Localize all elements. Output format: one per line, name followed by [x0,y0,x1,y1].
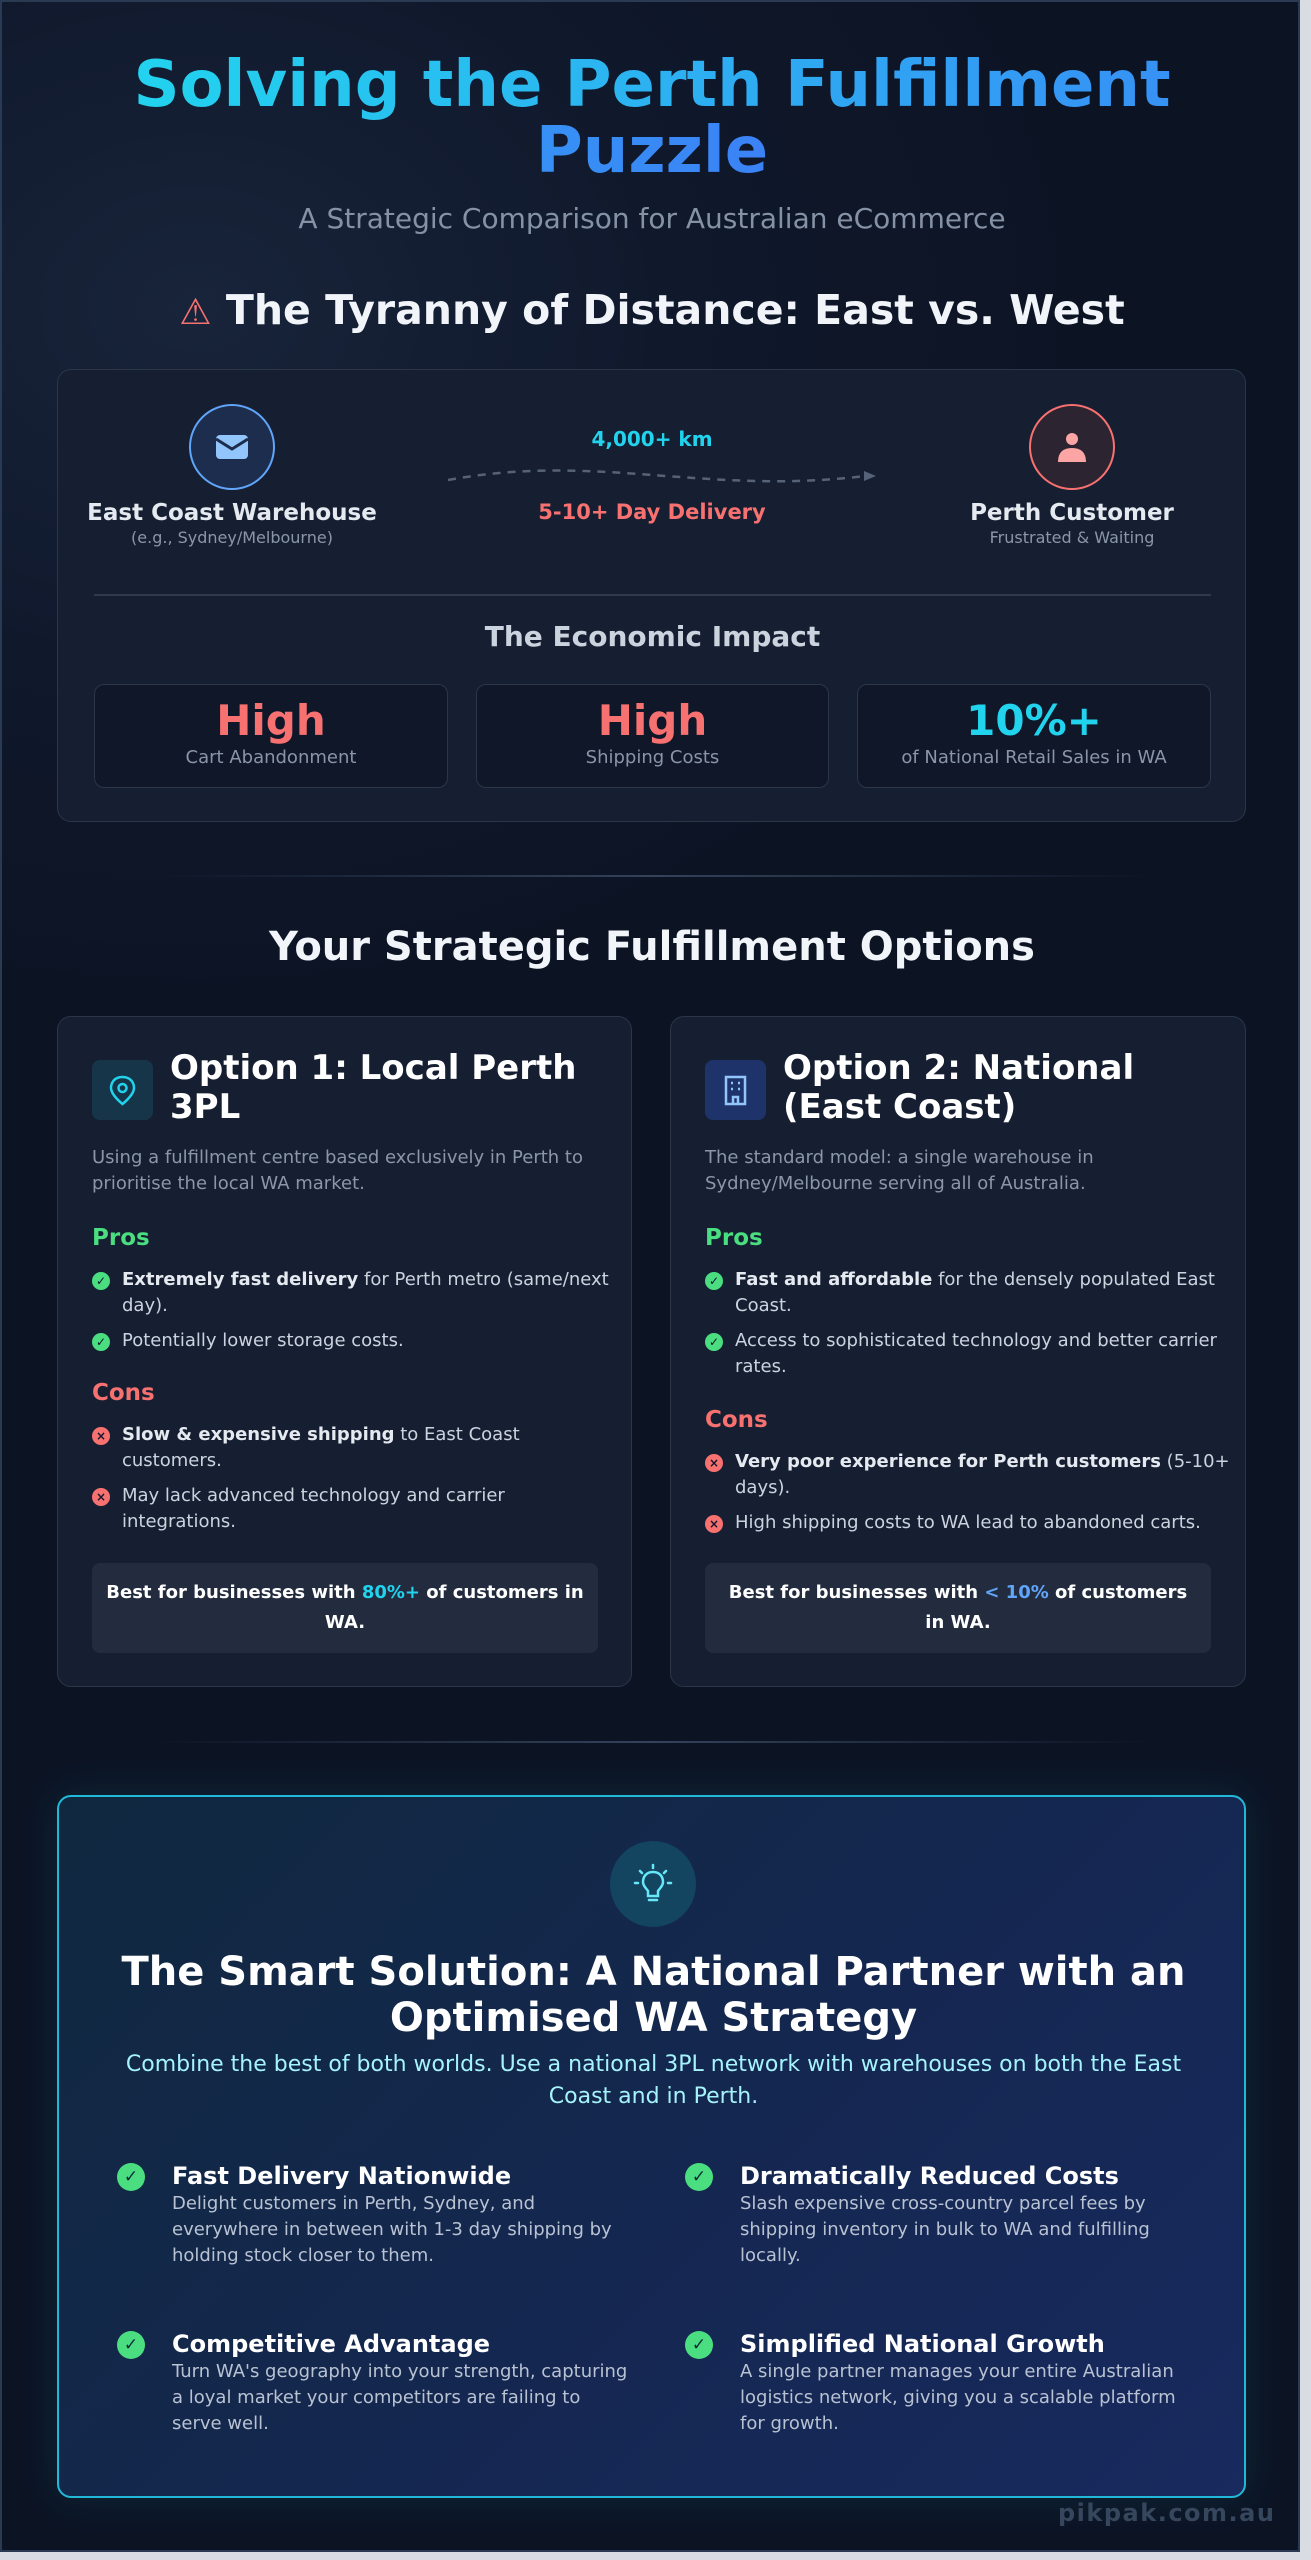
panel: smart solution: ✓ [124,2167,138,2187]
callout: option 1 best for: WA. [325,1612,365,1633]
feature: simplified growth: A single partner manages your entire Australian [740,2361,1174,2382]
solution title: Optimised WA Strategy [390,1995,917,2041]
feature: fast delivery: holding stock closer to them. [172,2245,434,2266]
label: east coast warehouse: East Coast Warehouse [87,500,377,526]
arrow: dashed route [448,469,876,482]
stat: shipping costs [476,684,829,788]
icon: map pin [92,1060,153,1120]
distance label: 4,000+ km [591,427,713,451]
option 1 title: Option 1: Local Perth 3PL [170,1048,576,1127]
heading: economic impact: The Economic Impact [485,620,820,653]
pro item: ✓ [96,1335,106,1349]
feature: simplified growth: for growth. [740,2413,839,2434]
feature: competitive advantage [117,2330,627,2434]
pro item: Extremely fast delivery for Perth metro (same/next day). [122,1269,609,1316]
panel: smart solution [57,1795,1246,2498]
callout: option 1 best for: Best for businesses with 80%+ of customers in [106,1582,584,1603]
option 2 title: Option 2: National (East Coast) [783,1048,1134,1127]
option 1 description: Using a fulfillment centre based exclusively in Perth to prioritise the local WA market. [92,1147,583,1194]
pro item: Fast and affordable for the densely populated East Coast. [735,1269,1215,1316]
solution title: The Smart Solution: A National Partner with an [121,1949,1186,1995]
icon: perth customer [1029,404,1115,490]
con item: × [96,1490,106,1504]
feature: competitive advantage: Competitive Advantage [172,2330,490,2358]
feature: simplified growth: Simplified National Growth [740,2330,1105,2358]
feature: fast delivery: Delight customers in Perth, Sydney, and [172,2193,535,2214]
solution title [121,1949,1186,2041]
solution subtitle: Coast and in Perth. [549,2084,758,2109]
feature: competitive advantage: serve well. [172,2413,269,2434]
feature: reduced costs: Slash expensive cross-country parcel fees by [740,2193,1146,2214]
feature: reduced costs: Dramatically Reduced Costs [740,2162,1119,2190]
pro item: ✓ [709,1335,719,1349]
feature: fast delivery: Fast Delivery Nationwide [172,2162,511,2190]
pro item: Potentially lower storage costs. [122,1330,404,1351]
pro item: ✓ [709,1274,719,1288]
panel: option 1 [57,1016,632,1687]
feature: fast delivery [117,2162,612,2266]
con item: May lack advanced technology and carrier integrations. [122,1485,505,1532]
pros heading: Pros [705,1225,763,1251]
feature: competitive advantage: a loyal market your competitors are failing to [172,2387,580,2408]
title [133,48,1171,188]
pro item: ✓ [96,1274,106,1288]
feature: reduced costs: shipping inventory in bulk to WA and fulfilling [740,2219,1150,2240]
solution subtitle [126,2052,1181,2109]
con item: × [709,1517,719,1531]
panel: smart solution: ✓ [692,2167,706,2187]
stat: national retail share [857,684,1211,788]
label: east coast warehouse: (e.g., Sydney/Melbourne) [131,528,333,547]
pros heading: Pros [92,1225,150,1251]
subtitle: A Strategic Comparison for Australian eCommerce [298,202,1006,235]
label: east coast warehouse [87,500,377,547]
label: perth customer: Frustrated & Waiting [990,528,1154,547]
title: Puzzle [536,114,768,188]
option 2 description: The standard model: a single warehouse in Sydney/Melbourne serving all of Australia. [705,1147,1094,1194]
stat: national retail share: 10%+ [966,696,1102,745]
panel: option 2 [670,1016,1246,1687]
callout: option 1 best for [92,1563,598,1653]
label: perth customer [970,500,1174,547]
callout: option 2 best for: in WA. [925,1612,991,1633]
feature: fast delivery: everywhere in between with 1-3 day shipping by [172,2219,612,2240]
stat: national retail share: of National Retail Sales in WA [901,747,1167,768]
icon: warehouse mail [189,404,275,490]
panel: distance [57,369,1246,822]
stat: shipping costs: Shipping Costs [586,747,719,768]
con item: × [96,1429,106,1443]
con item: High shipping costs to WA lead to abandoned carts. [735,1512,1201,1533]
stat: shipping costs: High [598,696,707,745]
delivery label: 5-10+ Day Delivery [538,500,766,524]
icon: building [705,1060,766,1120]
feature: simplified growth: logistics network, giving you a scalable platform [740,2387,1176,2408]
callout: option 2 best for: Best for businesses with < 10% of customers [729,1582,1187,1603]
feature: simplified growth [685,2330,1176,2434]
con item: × [709,1456,719,1470]
icon: lightbulb [610,1841,696,1927]
con item: Very poor experience for Perth customers (5-10+ days). [735,1451,1230,1498]
watermark: pikpak.com.au [1058,2499,1275,2527]
stat: cart abandonment: Cart Abandonment [186,747,356,768]
title: Solving the Perth Fulfillment [133,48,1171,122]
stat: cart abandonment [94,684,448,788]
callout: option 2 best for [705,1563,1211,1653]
label: perth customer: Perth Customer [970,500,1174,526]
cons heading: Cons [92,1380,155,1406]
heading: tyranny of distance: ⚠ The Tyranny of Distance: East vs. West [179,286,1125,334]
pro item: Access to sophisticated technology and better carrier rates. [735,1330,1217,1377]
stat: cart abandonment: High [216,696,326,745]
panel: smart solution: ✓ [124,2335,138,2355]
cons heading: Cons [705,1407,768,1433]
solution subtitle: Combine the best of both worlds. Use a national 3PL network with warehouses on both the East [126,2052,1181,2077]
con item: Slow & expensive shipping to East Coast customers. [122,1424,520,1471]
panel: smart solution: ✓ [692,2335,706,2355]
heading: strategic options: Your Strategic Fulfillment Options [269,924,1035,970]
feature: reduced costs [685,2162,1150,2266]
feature: competitive advantage: Turn WA's geography into your strength, capturing [172,2361,627,2382]
feature: reduced costs: locally. [740,2245,801,2266]
